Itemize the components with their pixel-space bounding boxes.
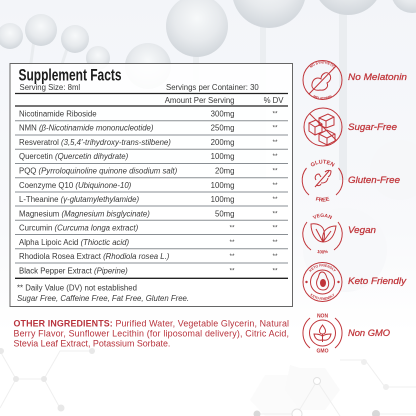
table rows: ** xyxy=(272,110,278,118)
table rows: 100mg xyxy=(211,152,234,161)
table rows: ** xyxy=(272,196,278,203)
table rows: 100mg xyxy=(211,195,234,204)
table rows: Coenzyme Q10 (Ubiquinone-10) xyxy=(19,181,132,190)
table rows: Rhodiola Rosea Extract (Rhodiola rosea L.) xyxy=(19,252,170,261)
table rows: ** xyxy=(229,253,235,260)
footnote xyxy=(17,284,189,303)
icon: keto avocado xyxy=(302,262,342,302)
background spheres xyxy=(0,0,416,292)
table rows: Resveratrol (3,5,4'-trihydroxy-trans-stilbene) xyxy=(19,138,171,147)
table rows: Magnesium (Magnesium bisglycinate) xyxy=(19,210,150,218)
icon: gluten free wheat: GLUTEN xyxy=(310,160,335,167)
icon: vegan leaves: 100% xyxy=(317,250,328,254)
table rows: ** xyxy=(272,224,278,232)
table rows: Quercetin (Quercetin dihydrate) xyxy=(19,152,129,161)
table rows: ** xyxy=(229,239,235,246)
table rows: ** xyxy=(272,168,278,174)
heading: Supplement Facts xyxy=(18,66,122,84)
background molecule right xyxy=(250,359,416,416)
label: sugar-free: Sugar-Free xyxy=(348,122,397,133)
table rows: 100mg xyxy=(211,181,234,190)
table rows: ** xyxy=(272,153,278,160)
icon: no melatonin: NO SYNTHETIC xyxy=(310,61,335,68)
label: no melatonin: No Melatonin xyxy=(348,72,407,83)
table header xyxy=(165,96,284,105)
panel: supplement facts xyxy=(10,64,292,306)
badge: non gmo xyxy=(303,314,391,354)
table rows: 200mg xyxy=(211,138,234,147)
table rows: 300mg xyxy=(211,110,234,118)
badge: no melatonin xyxy=(302,60,407,100)
icon: no melatonin xyxy=(302,60,342,100)
label: non gmo: Non GMO xyxy=(348,328,391,339)
table rows: ** xyxy=(272,210,278,218)
table rows: L-Theanine (γ-glutamylethylamide) xyxy=(19,195,139,204)
badge: vegan xyxy=(302,214,376,254)
icon: no melatonin: MELATONIN xyxy=(313,95,332,99)
serving info: Serving Size: 8ml xyxy=(20,83,80,92)
table rows: ** xyxy=(272,268,278,274)
table rows: ** xyxy=(272,182,278,189)
table rows: Alpha Lipoic Acid (Thioctic acid) xyxy=(19,238,129,247)
label: vegan: Vegan xyxy=(348,225,376,236)
icon: keto avocado: KETO FRIENDLY xyxy=(309,264,336,272)
icon: non gmo plant xyxy=(303,314,342,354)
icon: vegan leaves xyxy=(302,214,343,254)
footnote: Sugar Free, Caffeine Free, Fat Free, Gluten Free. xyxy=(17,294,189,303)
table rows: Black Pepper Extract (Piperine) xyxy=(19,266,128,276)
other ingredients: Stevia Leaf Extract, Potassium Sorbate. xyxy=(14,338,170,348)
other ingredients xyxy=(14,318,289,348)
badge: sugar-free xyxy=(304,108,397,146)
badge: gluten-free xyxy=(302,160,400,202)
table rows: ** xyxy=(272,124,278,132)
background molecule left xyxy=(0,348,95,412)
label: gluten-free: Gluten-Free xyxy=(348,175,400,186)
table rows: 20mg xyxy=(215,166,234,176)
table rows xyxy=(19,110,278,276)
table rows: NMN (β-Nicotinamide mononucleotide) xyxy=(19,124,154,132)
table rows: ** xyxy=(229,268,235,274)
other ingredients: OTHER INGREDIENTS: Purified Water, Vegetable Glycerin, Natural xyxy=(14,318,289,328)
table rows: 50mg xyxy=(215,210,234,218)
table header: % DV xyxy=(264,96,284,105)
icon: sugar cubes crossed xyxy=(304,108,342,146)
label: keto friendly: Keto Friendly xyxy=(348,276,407,287)
table rows: PQQ (Pyrroloquinoline quinone disodium salt) xyxy=(19,166,178,176)
icon: non gmo plant: NON xyxy=(317,314,328,320)
table rows: ** xyxy=(272,253,278,260)
footnote: ** Daily Value (DV) not established xyxy=(17,284,137,292)
table rows: ** xyxy=(272,239,278,246)
table rows: ** xyxy=(272,139,278,146)
table rows: Nicotinamide Riboside xyxy=(19,110,97,118)
icon: gluten free wheat xyxy=(302,160,344,202)
table rows: ** xyxy=(229,224,235,232)
icon: gluten free wheat: FREE xyxy=(316,196,330,202)
icon: keto avocado: KETO FRIENDLY xyxy=(310,294,334,300)
icon: vegan leaves: VEGAN xyxy=(312,214,332,220)
table rows: Curcumin (Curcuma longa extract) xyxy=(19,224,139,232)
serving info: Servings per Container: 30 xyxy=(166,83,259,92)
other ingredients: Berry Flavor, Sunflower Lecithin (for liposomal delivery), Citric Acid, xyxy=(14,328,289,338)
badge: keto friendly xyxy=(302,262,407,302)
table header: Amount Per Serving xyxy=(165,96,234,105)
table rows: 250mg xyxy=(211,124,234,132)
icon: non gmo plant: GMO xyxy=(317,348,329,354)
serving info xyxy=(20,83,259,92)
